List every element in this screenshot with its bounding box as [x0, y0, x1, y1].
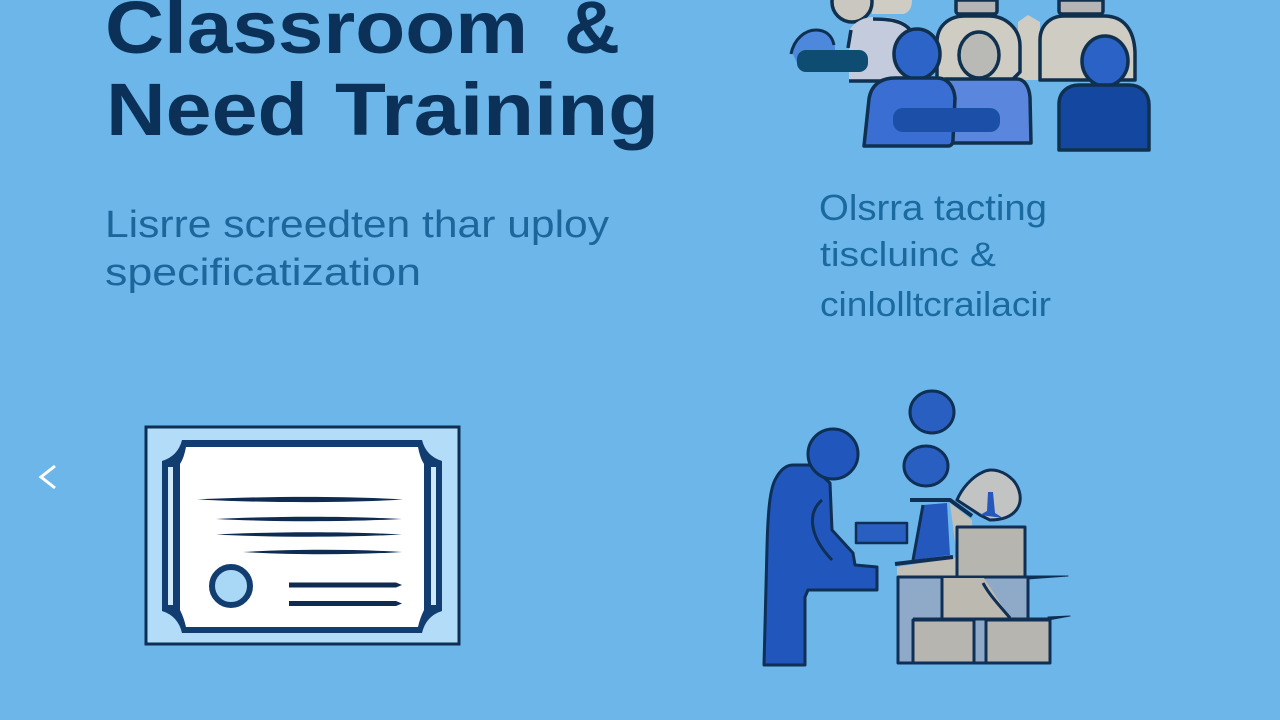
- side text block: cinlolltcrailacir: [820, 286, 1051, 324]
- side text block: Olsrra tacting: [819, 187, 1047, 228]
- front row left figure: [864, 29, 1000, 146]
- title: Need: [106, 68, 308, 151]
- box carried: [856, 523, 907, 543]
- icon: group of people: [791, 0, 1149, 150]
- side text block: [819, 187, 1051, 324]
- icon: worker and stacked boxes: [764, 391, 1070, 665]
- subtitle text: specificatization: [105, 252, 421, 294]
- upper heads: [910, 391, 954, 433]
- certificate frame: [162, 440, 442, 633]
- lightbulb shape: [957, 470, 1020, 520]
- icon: certificate: [146, 427, 459, 644]
- title: [105, 0, 659, 151]
- front row right figure: [1059, 36, 1149, 150]
- seated figure and counter: [897, 503, 972, 577]
- certificate seal: [212, 567, 250, 605]
- left small figure: [791, 29, 868, 72]
- icon: back arrow: [41, 466, 55, 488]
- subtitle text: Lisrre screedten thar uploy: [105, 204, 609, 246]
- subtitle text: [105, 204, 609, 294]
- stacked boxes: [898, 527, 1070, 663]
- side text block: tiscluinc &: [820, 236, 996, 274]
- title: Training: [335, 68, 659, 151]
- front row middle torso: [945, 79, 1031, 143]
- standing worker: [764, 429, 877, 665]
- back row figures: [832, 0, 1135, 81]
- certificate text lines: [197, 497, 403, 606]
